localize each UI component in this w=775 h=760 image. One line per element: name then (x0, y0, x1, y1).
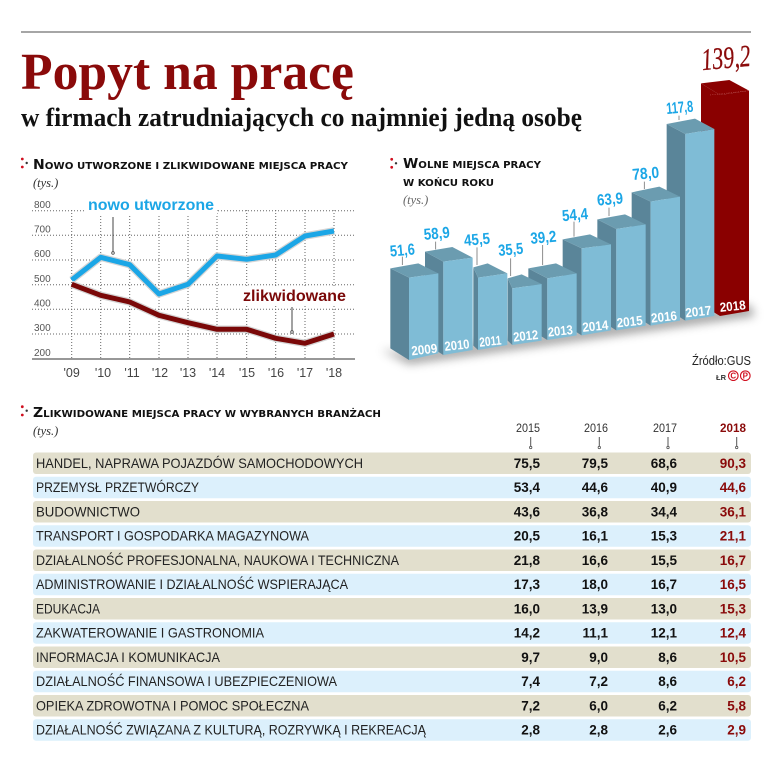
author and copyright marks: ŁR (716, 373, 727, 382)
row: accommodation: ZAKWATEROWANIE I GASTRONOMIA (36, 625, 265, 641)
icon: section bullet (21, 405, 28, 416)
row: manufacturing: 44,6 (720, 480, 746, 495)
line: newly created jobs (72, 231, 334, 294)
bar year labels (411, 297, 746, 358)
row: accommodation (33, 622, 751, 644)
y axis labels: 400 (34, 298, 51, 310)
row: accommodation: 11,1 (582, 626, 608, 641)
row: culture (33, 719, 751, 741)
row: administration: ADMINISTROWANIE I DZIAŁALNOŚĆ WSPIERAJĄCA (36, 575, 349, 592)
row: manufacturing: PRZEMYSŁ PRZETWÓRCZY (36, 479, 200, 495)
row: culture: DZIAŁALNOŚĆ ZWIĄZANA Z KULTURĄ, ROZRYWKĄ I REKREACJĄ (36, 721, 427, 738)
bar 2011 (473, 263, 507, 350)
callout: closed: zlikwidowane (243, 288, 346, 305)
y axis labels: 800 (34, 200, 51, 211)
bar 2013 (528, 263, 577, 340)
bar value labels (389, 38, 752, 261)
panel: closed jobs by industry table (21, 405, 751, 741)
row: manufacturing: 44,6 (582, 480, 608, 495)
row: trade: 75,5 (514, 456, 540, 471)
row: information: 8,6 (658, 650, 677, 665)
row: health care: OPIEKA ZDROWOTNA I POMOC SPOŁECZNA (36, 698, 310, 714)
row: finance: 6,2 (727, 674, 746, 689)
row: administration: 17,3 (514, 577, 540, 592)
row: transport (33, 525, 751, 547)
row: culture: 2,6 (658, 723, 677, 738)
row: education: 13,0 (651, 602, 677, 616)
row: accommodation: 14,2 (514, 626, 540, 641)
x axis labels: '16 (268, 366, 284, 380)
author and copyright marks: C (730, 372, 736, 381)
source note: Źródło:GUS (692, 353, 751, 368)
x axis labels: '17 (297, 366, 313, 380)
subtitle: w firmach zatrudniających co najmniej jedną osobę (21, 103, 582, 132)
heading: created and closed jobs: NOWO UTWORZONE I ZLIKWIDOWANE MIEJSCA PRACY (33, 158, 348, 173)
row: transport: 15,3 (651, 529, 677, 544)
row: construction: BUDOWNICTWO (36, 504, 140, 520)
panel: job vacancies bar chart (382, 38, 755, 382)
bars (382, 80, 755, 364)
row: health care (33, 695, 751, 716)
bar year labels: 2017 (685, 303, 712, 320)
bar 2017 (667, 119, 714, 321)
x axis labels: '18 (326, 366, 342, 380)
panel: line chart of created and closed jobs (21, 158, 355, 380)
heading: closed jobs by industry: ZLIKWIDOWANE MIEJSCA PRACY W WYBRANYCH BRANŻACH (33, 406, 381, 421)
row: culture: 2,9 (727, 723, 746, 738)
table year headers: 2017 (653, 423, 677, 435)
row: information: 10,5 (720, 650, 746, 665)
row: finance (33, 671, 751, 692)
row: transport: 21,1 (720, 529, 746, 544)
bar year labels: 2010 (444, 336, 470, 354)
unit label: (tys.) (403, 193, 428, 207)
x axis labels: '13 (180, 366, 196, 380)
y axis labels: 200 (34, 348, 51, 359)
row: transport: 20,5 (514, 529, 540, 544)
x axis labels: '12 (152, 366, 168, 380)
table year headers (516, 423, 747, 449)
y axis labels (34, 200, 51, 359)
row: professional activities: 16,7 (720, 553, 746, 568)
row: trade: 68,6 (651, 456, 677, 471)
row: administration: 16,5 (720, 577, 746, 592)
bar 2014 (563, 234, 611, 335)
x axis labels: '11 (124, 366, 140, 380)
bar 2015 (597, 214, 646, 330)
y axis labels: 600 (34, 249, 51, 260)
row: health care: 5,8 (727, 698, 746, 714)
row: manufacturing: 40,9 (651, 480, 677, 495)
line: closed jobs (72, 284, 334, 343)
bar 2018 (701, 80, 749, 316)
row: trade: HANDEL, NAPRAWA POJAZDÓW SAMOCHODOWYCH (36, 455, 363, 471)
row: information: INFORMACJA I KOMUNIKACJA (36, 649, 221, 665)
y axis labels: 700 (34, 224, 51, 236)
leader lines (402, 116, 679, 276)
y axis labels: 300 (34, 323, 51, 334)
icon: section bullet (21, 158, 28, 168)
row: education: 13,9 (582, 602, 608, 616)
bar year labels: 2011 (479, 332, 502, 350)
row: trade: 90,3 (720, 456, 746, 471)
bar 2012 (508, 274, 542, 345)
row: finance: 7,4 (521, 674, 540, 689)
row: administration: 16,7 (651, 577, 677, 592)
bar value labels: 78,0 (632, 165, 660, 184)
table year headers: 2016 (584, 423, 608, 435)
heading: vacancies: W KOŃCU ROKU (403, 177, 494, 189)
heading: vacancies: WOLNE MIEJSCA PRACY (403, 157, 541, 172)
row: professional activities: 16,6 (582, 553, 608, 568)
row: health care: 6,0 (589, 698, 608, 714)
row: administration (33, 574, 751, 595)
row: education: 15,3 (720, 602, 746, 616)
author and copyright marks (716, 371, 750, 382)
row: trade: 79,5 (582, 456, 608, 471)
bar value labels: 58,9 (423, 225, 451, 244)
bar value labels: 39,2 (530, 229, 557, 248)
row: information (33, 646, 751, 668)
row: education (33, 598, 751, 620)
row: construction (33, 501, 751, 522)
row: trade (33, 452, 751, 474)
bar 2009 (390, 263, 438, 360)
y axis labels: 500 (34, 274, 51, 285)
author and copyright marks: P (743, 372, 749, 381)
bar value labels: 51,6 (389, 241, 416, 261)
row: manufacturing (33, 477, 751, 498)
bar year labels: 2012 (512, 327, 539, 345)
row: transport: TRANSPORT I GOSPODARKA MAGAZYNOWA (36, 528, 310, 544)
bar year labels: 2014 (582, 317, 610, 335)
x axis labels: '15 (239, 366, 255, 380)
x axis labels: '09 (64, 366, 80, 380)
row: manufacturing: 53,4 (514, 480, 540, 495)
row: construction: 36,8 (582, 504, 608, 520)
row: transport: 16,1 (582, 529, 608, 544)
bar year labels: 2016 (650, 308, 678, 326)
row: education: 16,0 (514, 602, 540, 616)
row: health care: 6,2 (658, 698, 677, 714)
row: finance: DZIAŁALNOŚĆ FINANSOWA I UBEZPIECZENIOWA (36, 672, 338, 689)
row: construction: 43,6 (514, 504, 540, 520)
bar year labels: 2009 (411, 341, 438, 358)
x axis labels (64, 366, 342, 380)
bar year labels: 2015 (616, 313, 643, 330)
bar 2016 (632, 187, 680, 326)
bar value labels: 54,4 (561, 206, 589, 225)
row: culture: 2,8 (589, 723, 608, 738)
bar year labels: 2013 (547, 322, 573, 340)
row: construction: 36,1 (720, 504, 746, 520)
row: accommodation: 12,4 (720, 626, 746, 641)
row: professional activities (33, 550, 751, 571)
icon: section bullet (390, 158, 397, 169)
row: construction: 34,4 (651, 504, 677, 520)
row: finance: 7,2 (589, 674, 608, 689)
unit label: (tys.) (33, 176, 58, 190)
row: professional activities: 21,8 (514, 553, 540, 568)
bar value labels: 117,8 (666, 99, 694, 118)
row: culture: 2,8 (521, 723, 540, 738)
bar value labels: 63,9 (596, 190, 624, 210)
table year headers: 2015 (516, 423, 540, 435)
heading: vacancies (403, 157, 541, 189)
bar value labels: 139,2 (700, 38, 752, 77)
row: health care: 7,2 (521, 698, 540, 714)
row: information: 9,0 (589, 650, 608, 665)
row: information: 9,7 (521, 650, 540, 665)
bar year labels: 2018 (719, 297, 746, 315)
row: finance: 8,6 (658, 674, 677, 689)
row: professional activities: 15,5 (651, 553, 677, 568)
x axis labels: '14 (209, 366, 225, 380)
callout: closed (241, 288, 348, 333)
title: Popyt na pracę (21, 44, 354, 101)
table year headers: 2018 (720, 423, 747, 435)
line chart (32, 196, 355, 380)
bar value labels: 45,5 (463, 231, 491, 250)
row: professional activities: DZIAŁALNOŚĆ PROFESJONALNA, NAUKOWA I TECHNICZNA (36, 551, 400, 568)
bar 2010 (425, 247, 473, 355)
callout: newly created (86, 196, 217, 254)
row: administration: 18,0 (582, 577, 608, 592)
callout: newly created: nowo utworzone (88, 197, 214, 214)
x axis labels: '10 (95, 366, 111, 380)
unit label: (tys.) (33, 424, 58, 438)
row: accommodation: 12,1 (651, 626, 677, 641)
bar value labels: 35,5 (498, 241, 524, 260)
row: education: EDUKACJA (36, 600, 101, 616)
